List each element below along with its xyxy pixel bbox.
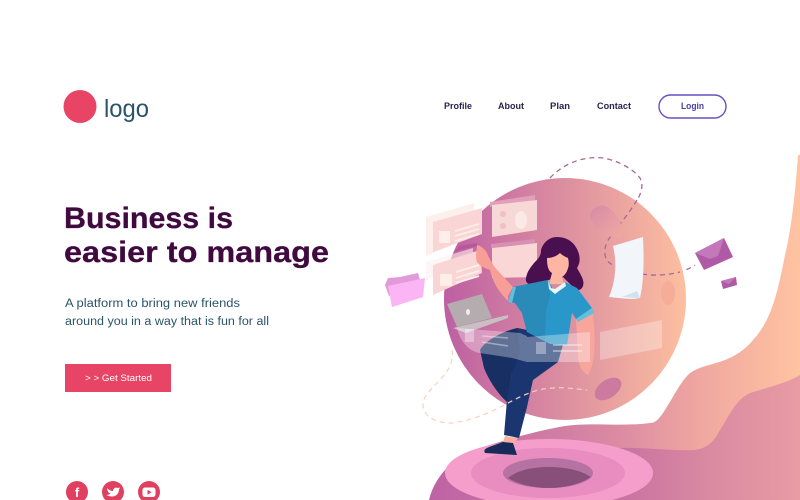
description: A platform to bring new friends (65, 298, 240, 310)
front leg (504, 328, 565, 438)
background hill (429, 155, 800, 500)
login button: Login (681, 101, 704, 111)
logo wordmark: logo (104, 95, 149, 123)
logo (64, 90, 149, 123)
dashed orbit lower (423, 350, 587, 423)
icon: folder (385, 273, 425, 307)
sleeve cuff (576, 308, 594, 322)
front hill layer (600, 375, 800, 500)
icon: facebook: f (75, 485, 80, 500)
headline (64, 202, 329, 269)
panel: upper left back (426, 203, 474, 256)
description (65, 298, 269, 328)
sphere crater right (661, 281, 675, 305)
sphere crater bottom (591, 373, 625, 405)
nav: About: About (498, 101, 524, 111)
dashed orbit top (550, 158, 695, 275)
shirt shading (508, 280, 550, 340)
nav: Contact: Contact (597, 101, 631, 111)
shoe (484, 442, 517, 455)
floor disk (445, 439, 653, 500)
back leg (480, 328, 528, 402)
dashed orbit over sphere (605, 200, 680, 275)
icon: twitter (102, 481, 124, 500)
nav: Profile: Profile (444, 101, 472, 111)
headline: easier to manage (64, 236, 329, 269)
person (476, 237, 595, 455)
collar (548, 280, 566, 294)
panel: middle right card (491, 239, 537, 278)
headline: Business is (64, 202, 233, 235)
hair (526, 237, 583, 290)
sleeve cuff left (508, 287, 516, 303)
navigation (444, 101, 631, 111)
hand pointer shadow (455, 243, 478, 252)
paper (609, 237, 644, 299)
icon: youtube (138, 481, 160, 500)
laptop (447, 294, 508, 333)
description: around you in a way that is fun for all (65, 316, 269, 328)
get started button (65, 364, 171, 392)
translucent cards bottom (457, 328, 590, 362)
translucent wide card right (600, 320, 662, 360)
shirt (508, 280, 592, 345)
icon: large envelope (695, 238, 733, 270)
right arm (576, 310, 595, 375)
nav: Plan: Plan (550, 101, 570, 111)
face and neck (547, 253, 569, 284)
logo mark (64, 90, 96, 123)
left arm (476, 245, 513, 301)
sphere (444, 178, 686, 420)
social icons (66, 481, 160, 500)
panel: upper right card (490, 195, 537, 237)
icon: small envelope (721, 277, 737, 289)
panel: lower left card (426, 248, 482, 295)
ankle (503, 436, 518, 444)
sphere blob (590, 206, 622, 237)
login button (659, 95, 726, 118)
get started button: > > Get Started (85, 373, 152, 383)
panel: upper left card (433, 208, 482, 252)
